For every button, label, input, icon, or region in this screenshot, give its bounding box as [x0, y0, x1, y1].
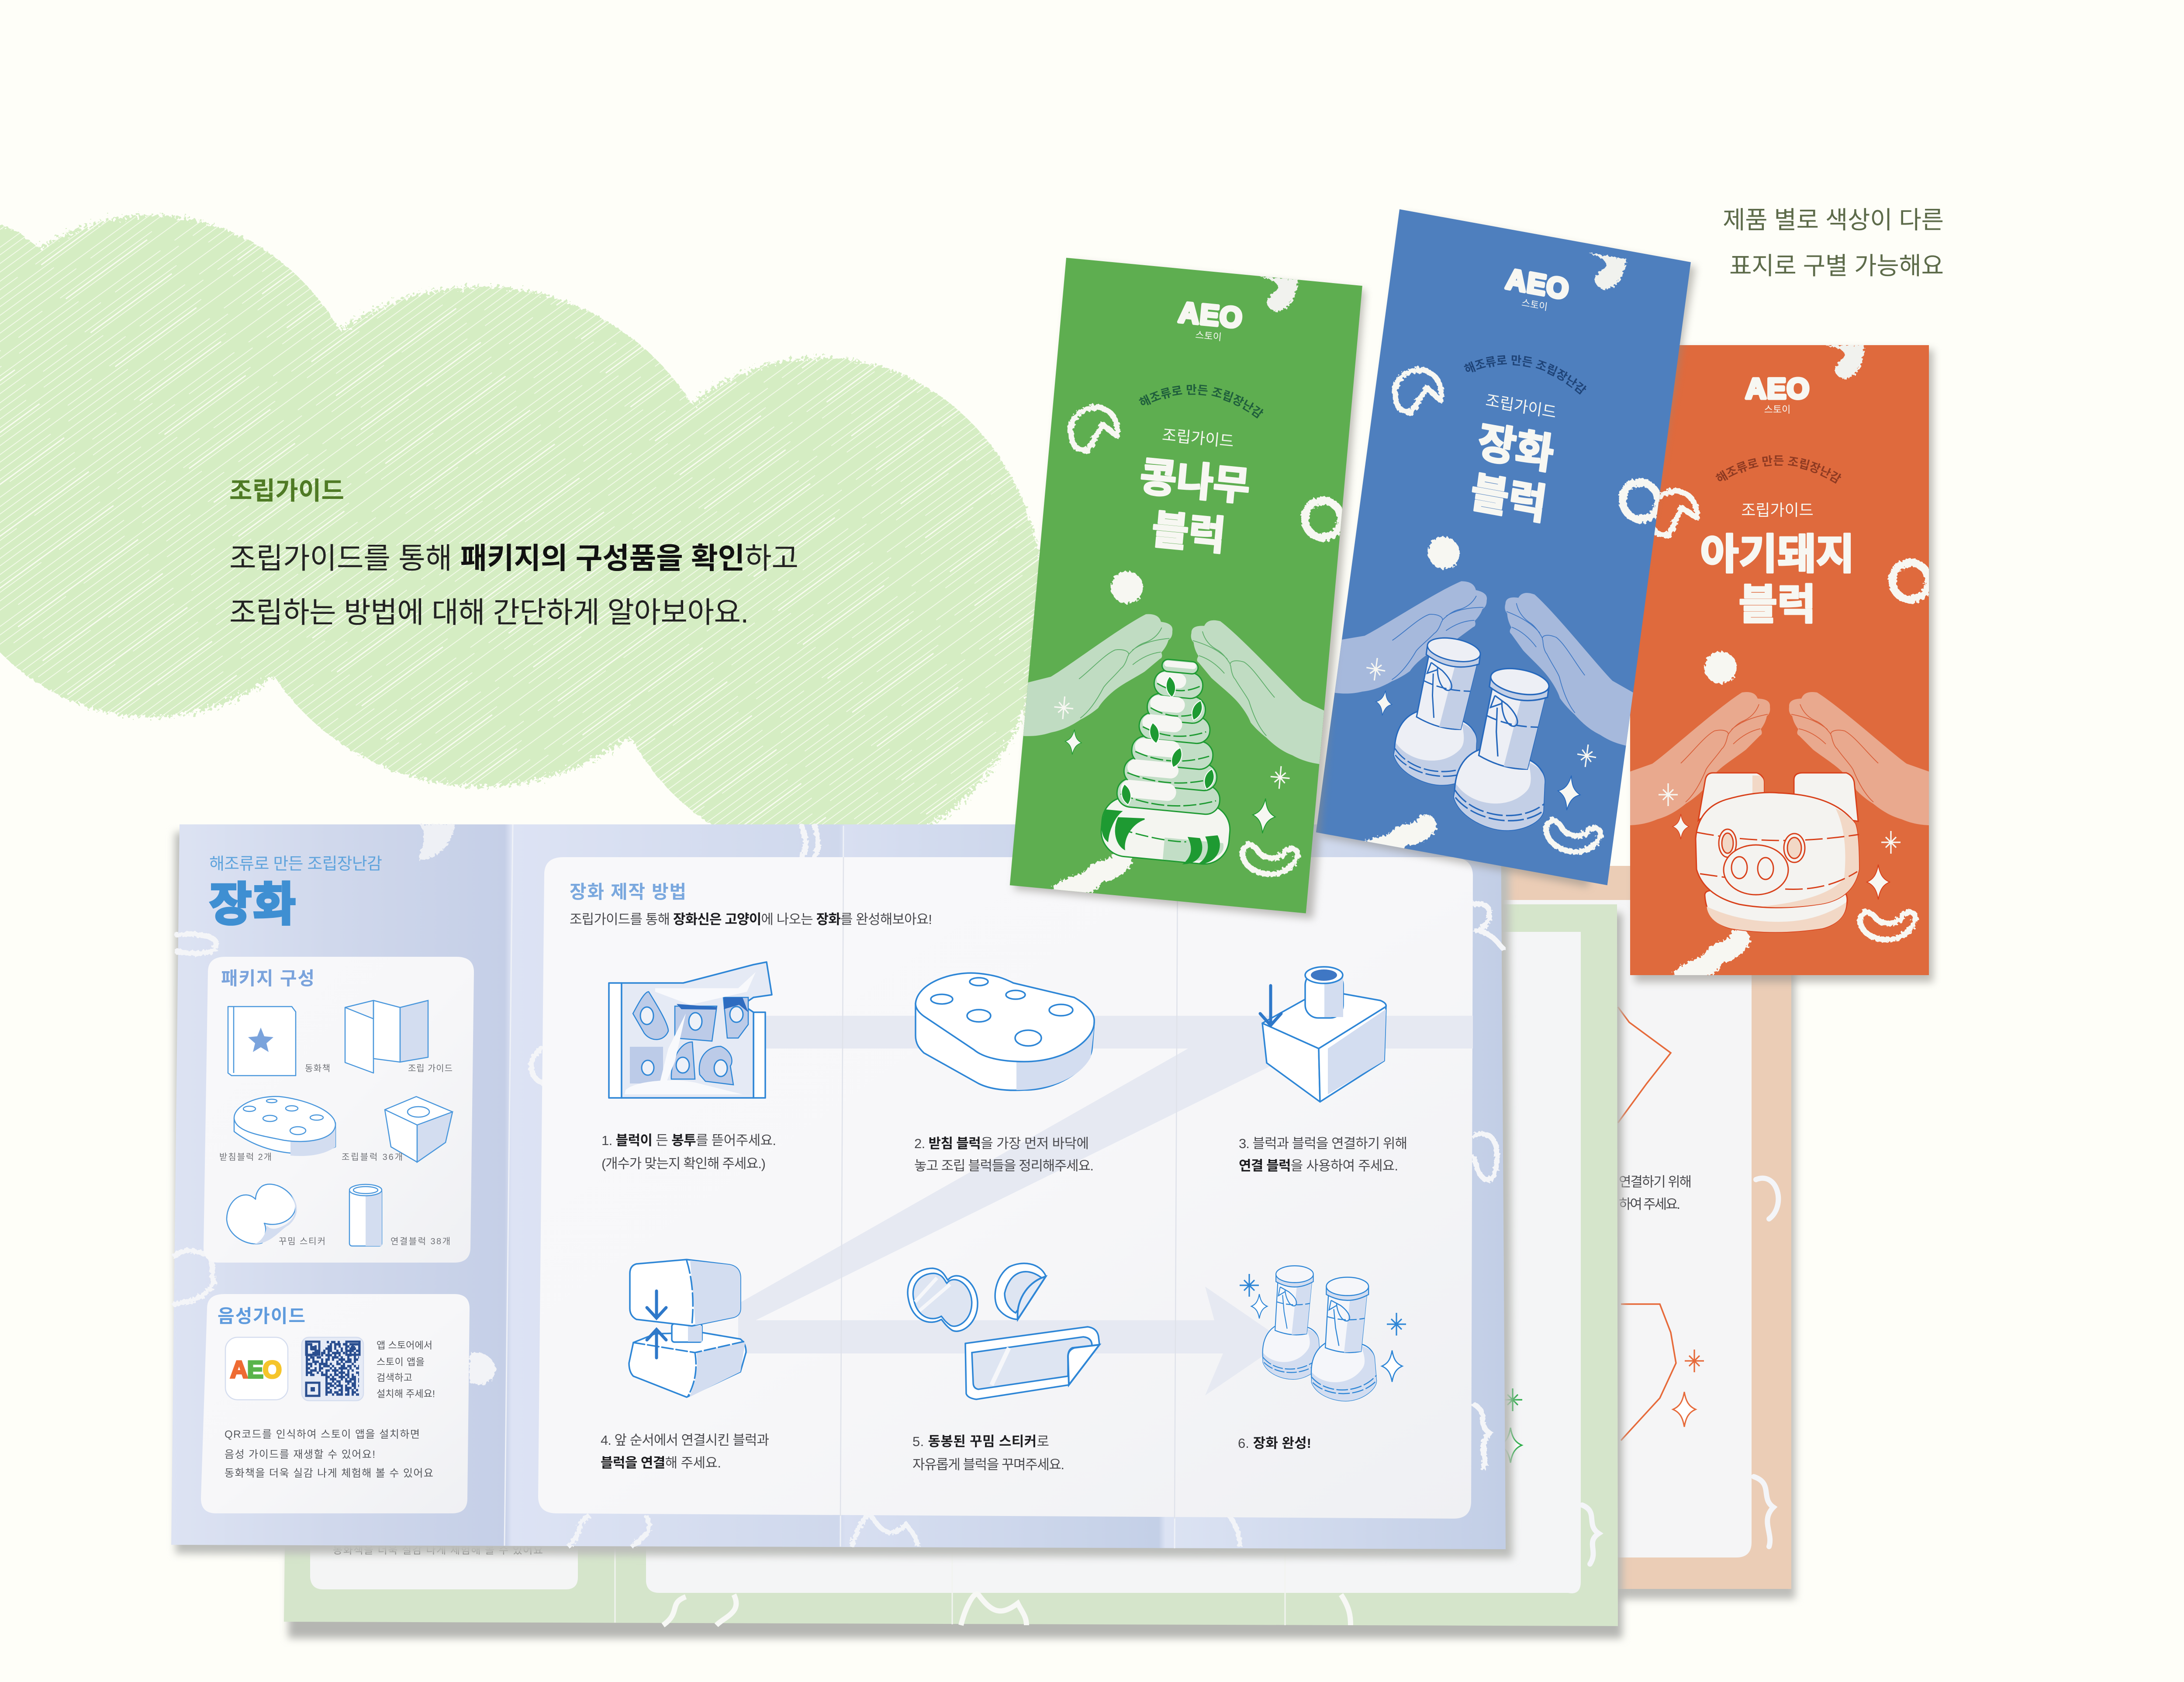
- title: 장화: 장화: [209, 879, 296, 931]
- step 3 text: [1239, 1136, 1407, 1173]
- icon: app: [225, 1337, 288, 1400]
- panel: peach guide (back): 연결하기 위해: [1619, 1174, 1692, 1190]
- title: 장화: [1475, 419, 1556, 478]
- item: connecting block: [349, 1184, 450, 1246]
- intro text: [229, 542, 798, 629]
- intro heading: 조립가이드: [229, 477, 344, 505]
- QR description: QR코드를 인식하여 스토이 앱을 설치하면: [225, 1429, 420, 1440]
- green scribble cloud: [0, 211, 1040, 824]
- illustration: pig: [1696, 773, 1859, 932]
- item: sticker: [227, 1184, 325, 1246]
- step 1 text: 1. 블럭이 든 봉투를 뜯어주세요.: [601, 1133, 776, 1148]
- step 2 text: 2. 받침 블럭을 가장 먼저 바닥에: [914, 1136, 1089, 1151]
- cover: green: [1009, 258, 1365, 919]
- arc tagline: 해조류로 만든 조립장난감: [1137, 378, 1267, 422]
- QR description: 음성 가이드를 재생할 수 있어요!: [225, 1449, 375, 1461]
- step 2 text: [914, 1136, 1094, 1173]
- step 3 illustration: cube and connector: [1260, 967, 1386, 1102]
- description: 조립가이드를 통해 장화신은 고양이에 나오는 장화를 완성해보아요!: [570, 912, 932, 927]
- logo: 스토이: [1521, 297, 1548, 312]
- title: [1700, 531, 1855, 628]
- cover: orange: [1630, 345, 1933, 982]
- step 2 text: 놓고 조립 블럭들을 정리해주세요.: [914, 1158, 1094, 1173]
- caption top right: 제품 별로 색상이 다른: [1723, 206, 1944, 234]
- step 5 text: 5. 동봉된 꾸밈 스티커로: [912, 1434, 1049, 1449]
- app text: [377, 1340, 435, 1399]
- logo: 스토이: [1195, 329, 1222, 343]
- app text: 설치해 주세요!: [377, 1388, 435, 1399]
- step 5 illustration: stickers: [908, 1263, 1099, 1399]
- step 4 text: 블럭을 연결해 주세요.: [601, 1455, 721, 1471]
- title: [1468, 419, 1556, 529]
- card: package contents: [204, 957, 474, 1263]
- title: 아기돼지: [1700, 531, 1855, 578]
- step 1 illustration: bag: [609, 962, 772, 1098]
- step 5 text: [912, 1434, 1064, 1472]
- label: 조립가이드: [1485, 391, 1557, 422]
- card: voice guide: [201, 1294, 470, 1513]
- QR code: [302, 1337, 363, 1401]
- logo: AEO: [1177, 296, 1244, 334]
- panel: blue guide (front): [171, 824, 1513, 1558]
- step 3 text: 연결 블럭을 사용하여 주세요.: [1239, 1158, 1398, 1173]
- QR description: [225, 1429, 433, 1479]
- panel: green guide (back): [284, 904, 1622, 1638]
- icon: app: AEO: [230, 1356, 282, 1383]
- item: assembly block: [342, 1097, 453, 1162]
- title: 블럭: [1468, 469, 1549, 529]
- item: assembly guide: [345, 1000, 453, 1073]
- label: 조립가이드: [1741, 501, 1814, 519]
- step 1 text: (개수가 맞는지 확인해 주세요.): [601, 1156, 766, 1171]
- title: 콩나무: [1138, 454, 1252, 509]
- title: 블럭: [1739, 581, 1816, 628]
- fold lines: [505, 824, 1178, 1548]
- panel: peach guide (back): 하여 주세요.: [1619, 1197, 1680, 1212]
- step 4 text: [601, 1433, 769, 1471]
- tower leaves: [1118, 671, 1224, 814]
- step 4 text: 4. 앞 순서에서 연결시킨 블럭과: [601, 1433, 769, 1448]
- step 1 text: [601, 1133, 776, 1171]
- item: picture book: [228, 1007, 330, 1076]
- item: sticker: 꾸밈 스티커: [279, 1236, 325, 1246]
- card: how to make: [538, 857, 1473, 1519]
- step 6 illustration: boots: [1240, 1266, 1406, 1401]
- item: base block: 받침블럭 2개: [219, 1152, 272, 1162]
- app text: 앱 스토어에서: [377, 1340, 432, 1351]
- item: assembly block: 조립블럭 36개: [342, 1152, 403, 1162]
- illustration: bean stalk tower: [1099, 654, 1245, 868]
- panel: green guide (back): 동화책을 더욱 실감 나게 체험해 볼 수 있어요: [333, 1544, 543, 1556]
- panel background: [171, 824, 1506, 1549]
- heading: 패키지 구성: [221, 968, 314, 989]
- item: assembly guide: 조립 가이드: [408, 1063, 453, 1073]
- logo: AEO: [1504, 263, 1571, 305]
- QR description: 동화책을 더욱 실감 나게 체험해 볼 수 있어요: [225, 1467, 433, 1479]
- decorative squiggles: [175, 824, 1503, 1547]
- fold lines: [840, 857, 1178, 1519]
- heading: 음성가이드: [218, 1306, 305, 1326]
- caption top right: [1723, 206, 1944, 280]
- item: connecting block: 연결블럭 38개: [390, 1236, 450, 1246]
- panel: peach guide (back): [1503, 866, 1795, 1599]
- step 6 text: 6. 장화 완성!: [1238, 1436, 1311, 1451]
- title: 블럭: [1150, 507, 1227, 559]
- logo: AEO: [1745, 372, 1809, 405]
- app text: 스토이 앱을: [377, 1357, 425, 1367]
- step 5 text: 자유롭게 블럭을 꾸며주세요.: [912, 1457, 1064, 1472]
- title: [1133, 454, 1252, 561]
- step 3 text: 3. 블럭과 블럭을 연결하기 위해: [1239, 1136, 1407, 1151]
- step 2 illustration: base block: [916, 973, 1094, 1090]
- flow arrow watermark: [738, 1016, 1473, 1395]
- arc tagline: 해조류로 만든 조립장난감: [1461, 344, 1591, 398]
- step 4 illustration: blocks connecting: [629, 1260, 746, 1397]
- intro text: 조립가이드를 통해 패키지의 구성품을 확인하고: [229, 542, 798, 575]
- logo: 스토이: [1764, 404, 1790, 415]
- heading: 장화 제작 방법: [570, 882, 686, 902]
- caption top right: 표지로 구별 가능해요: [1729, 252, 1944, 280]
- label: 조립가이드: [1161, 426, 1235, 450]
- brand subtitle: 해조류로 만든 조립장난감: [209, 855, 382, 873]
- item: base block: [219, 1097, 335, 1162]
- app text: 검색하고: [377, 1372, 412, 1383]
- cover: blue: [1314, 209, 1696, 897]
- intro text: 조립하는 방법에 대해 간단하게 알아보아요.: [229, 596, 749, 629]
- arc tagline: 해조류로 만든 조립장난감: [1714, 454, 1843, 486]
- illustration: boots: [1386, 631, 1564, 837]
- item: picture book: 동화책: [305, 1063, 330, 1073]
